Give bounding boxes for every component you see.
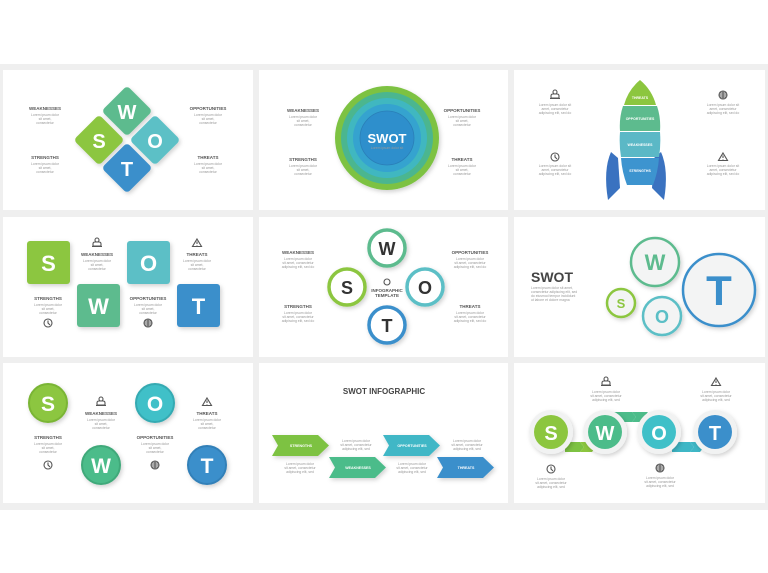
panel: connected circles: Lorem ipsum dolor [537, 477, 566, 481]
panel: rocket: amet, consectetur [542, 168, 569, 172]
panel: diamond SWOT [3, 70, 253, 210]
labels [29, 106, 61, 125]
panel: concentric circles: STRENGTHS [289, 157, 317, 162]
panel: rocket: Lorem ipsum dolor sit [707, 103, 739, 107]
panel: square tiles: Lorem ipsum dolor [83, 259, 112, 263]
panel: square tiles: Lorem ipsum dolor [134, 303, 163, 307]
panel: square tiles: sit amet, [142, 307, 154, 311]
panel: ring circles: STRENGTHS [284, 304, 312, 309]
panel: chevron arrows: sit amet, consectetur [451, 443, 484, 447]
panel: square tiles: consectetur [39, 311, 58, 315]
panel: bubble SWOT: W [645, 250, 666, 275]
panel: concentric circles [259, 70, 508, 210]
panel: chevron arrows: WEAKNESSES [345, 466, 371, 470]
panel: connected circles: S [544, 423, 558, 445]
panel: diamond SWOT: W [118, 102, 137, 124]
panel: chevron arrows: sit amet, consectetur [340, 443, 373, 447]
panel: ring circles: T [382, 316, 392, 336]
panel: square tiles: T [192, 294, 206, 319]
panel: diamond SWOT: T [121, 159, 133, 181]
panel: square tiles: S [41, 251, 56, 276]
panel: chevron arrows: THREATS [458, 466, 475, 470]
panel: concentric circles: sit amet, [456, 168, 468, 172]
panel: concentric circles: Lorem ipsum dolor [289, 115, 318, 119]
labels: consectetur [36, 121, 55, 125]
panel: round badges: sit amet, [201, 422, 213, 426]
panel: ring circles: Lorem ipsum dolor [284, 257, 313, 261]
panel: diamond SWOT: OPPORTUNITIES [190, 106, 226, 111]
panel: round badges: consectetur [146, 450, 165, 454]
panel: square tiles: W [88, 294, 109, 319]
rocket [606, 80, 666, 200]
panel: square tiles: STRENGTHS [34, 296, 62, 301]
panel: ring circles: O [418, 278, 432, 298]
panel: diamond SWOT: consectetur [199, 121, 218, 125]
rocket: STRENGTHS [629, 169, 651, 173]
panel: connected circles: sit amet, consectetur [700, 394, 733, 398]
panel: ring circles: TEMPLATE [375, 293, 399, 298]
panel: round badges: T [201, 455, 214, 478]
panel: concentric circles: Lorem ipsum dolor [289, 164, 318, 168]
panel: round badges: consectetur [92, 426, 111, 430]
panel: ring circles: THREATS [460, 304, 480, 309]
panel: square tiles [3, 217, 253, 357]
panel: ring circles: adipiscing elit, sed do [454, 319, 486, 323]
panel: round badges: Lorem ipsum dolor [87, 418, 116, 422]
panel: concentric circles: sit amet, [456, 119, 468, 123]
panel: connected circles: T [709, 423, 721, 445]
panel: square tiles: OPPORTUNITIES [130, 296, 166, 301]
panel: diamond SWOT: Lorem ipsum dolor [194, 113, 223, 117]
panel: chevron arrows: sit amet, consectetur [284, 466, 317, 470]
panel: square tiles: Lorem ipsum dolor [183, 259, 212, 263]
panel: chevron arrows: adipiscing elit, sed [286, 470, 314, 474]
panel: rocket: Lorem ipsum dolor sit [707, 164, 739, 168]
panel: bubble SWOT: SWOT [531, 269, 573, 285]
panel: chevron arrows: adipiscing elit, sed [398, 470, 426, 474]
panel: ring circles: INFOGRAPHIC [371, 288, 404, 293]
panel: chevron arrows [259, 363, 508, 503]
panel: concentric circles: sit amet, [297, 119, 309, 123]
panel: bubble SWOT: S [617, 296, 626, 311]
panel: round badges: sit amet, [95, 422, 107, 426]
panel: ring circles: W [378, 239, 396, 259]
panel: diamond SWOT: sit amet, [202, 117, 214, 121]
panel: connected circles [514, 363, 765, 503]
panel: chevron arrows: adipiscing elit, sed [342, 447, 370, 451]
panel: chevron arrows: Lorem ipsum dolor [398, 462, 427, 466]
panel: concentric circles: consectetur [294, 172, 313, 176]
panel: diamond SWOT: sit amet, [39, 166, 51, 170]
panel: chevron arrows: STRENGTHS [290, 444, 313, 448]
panel: concentric circles: Lorem ipsum dolor [448, 115, 477, 119]
rocket: THREATS [632, 96, 649, 100]
panel: connected circles: Lorem ipsum dolor [702, 390, 731, 394]
panel: concentric circles: consectetur [453, 172, 472, 176]
panel: round badges: Lorem ipsum dolor [34, 442, 63, 446]
panel: rocket: adipiscing elit, sed do [707, 111, 739, 115]
panel: square tiles: O [140, 251, 157, 276]
panel: bubble SWOT: Lorem ipsum dolor sit amet, [531, 286, 573, 290]
panel: square tiles: sit amet, [91, 263, 103, 267]
panel: round badges: STRENGTHS [34, 435, 62, 440]
panel: diamond SWOT: Lorem ipsum dolor [194, 162, 223, 166]
panel: concentric circles: Lorem ipsum dolor [448, 164, 477, 168]
panel: connected circles: O [651, 423, 667, 445]
panel: square tiles: WEAKNESSES [81, 252, 113, 257]
circle target [335, 86, 439, 190]
labels: Lorem ipsum dolor [31, 113, 60, 117]
panel: bubble SWOT: do eiusmod tempor incididunt [531, 294, 575, 298]
panel: connected circles: sit amet, consectetur [535, 481, 568, 485]
panel: ring circles: S [341, 278, 353, 298]
panel: rocket: Lorem ipsum dolor sit [539, 103, 571, 107]
panel: rocket: amet, consectetur [710, 107, 737, 111]
panel: ring circles: Lorem ipsum dolor [456, 311, 485, 315]
panel: round badges: S [41, 393, 55, 416]
panel: chevron arrows: sit amet, consectetur [396, 466, 429, 470]
rocket: OPPORTUNITIES [626, 117, 655, 121]
panel: concentric circles: OPPORTUNITIES [444, 108, 480, 113]
panel: ring circles: Lorem ipsum dolor [284, 311, 313, 315]
panel: ring circles: adipiscing elit, sed do [454, 265, 486, 269]
panel: chevron arrows: OPPORTUNITIES [397, 444, 427, 448]
panel: ring circles: sit amet, consectetur [454, 315, 487, 319]
panel: ring circles [259, 217, 508, 357]
panel: ring circles: sit amet, consectetur [454, 261, 487, 265]
panel: chevron arrows: Lorem ipsum dolor [286, 462, 315, 466]
panel: rocket: amet, consectetur [542, 107, 569, 111]
panel: ring circles: adipiscing elit, sed do [282, 265, 314, 269]
panel: ring circles: sit amet, consectetur [282, 315, 315, 319]
panel: diamond SWOT: consectetur [199, 170, 218, 174]
panel: concentric circles: consectetur [453, 123, 472, 127]
panel: concentric circles: SWOT [368, 131, 407, 146]
panel: connected circles: sit amet, consectetur [644, 480, 677, 484]
panel: diamond SWOT: sit amet, [202, 166, 214, 170]
panel: round badges [3, 363, 253, 503]
panel: square tiles: THREATS [187, 252, 207, 257]
panel: round badges: W [91, 455, 111, 478]
panel: round badges: Lorem ipsum dolor [141, 442, 170, 446]
panel: connected circles: adipiscing elit, sed [592, 398, 620, 402]
panel: square tiles: sit amet, [191, 263, 203, 267]
panel: concentric circles: THREATS [452, 157, 472, 162]
panel: square tiles: Lorem ipsum dolor [34, 303, 63, 307]
panel: round badges: consectetur [39, 450, 58, 454]
panel: rocket: adipiscing elit, sed do [539, 172, 571, 176]
panel: square tiles: sit amet, [42, 307, 54, 311]
panel: round badges: consectetur [198, 426, 217, 430]
panel: connected circles: adipiscing elit, sed [537, 485, 565, 489]
panel: concentric circles: consectetur [294, 123, 313, 127]
panel: connected circles: Lorem ipsum dolor [646, 476, 675, 480]
background band [0, 64, 768, 510]
panel: bubble SWOT: T [706, 267, 732, 314]
panel: connected circles: sit amet, consectetur [590, 394, 623, 398]
panel: chevron arrows: Lorem ipsum dolor [342, 439, 371, 443]
panel: rocket: amet, consectetur [710, 168, 737, 172]
panel: ring circles: OPPORTUNITIES [452, 250, 488, 255]
panel: chevron arrows: Lorem ipsum dolor [453, 439, 482, 443]
panel: ring circles: sit amet, consectetur [282, 261, 315, 265]
panel: chevron arrows: adipiscing elit, sed [453, 447, 481, 451]
labels: sit amet, [39, 117, 51, 121]
panel: diamond SWOT: O [147, 131, 163, 153]
panel: concentric circles: sit amet, [297, 168, 309, 172]
panel: concentric circles: WEAKNESSES [287, 108, 319, 113]
panel: connected circles: adipiscing elit, sed [702, 398, 730, 402]
panel: square tiles: consectetur [188, 267, 207, 271]
panel: rocket [514, 70, 765, 210]
panel: ring circles: WEAKNESSES [282, 250, 314, 255]
panel: connected circles: Lorem ipsum dolor [592, 390, 621, 394]
panel: round badges: THREATS [197, 411, 217, 416]
panel: bubble SWOT [514, 217, 765, 357]
panel: diamond SWOT: THREATS [198, 155, 218, 160]
panel: bubble SWOT: O [655, 307, 669, 327]
panel: diamond SWOT: STRENGTHS [31, 155, 59, 160]
panel: square tiles: consectetur [139, 311, 158, 315]
panel: concentric circles: Lorem ipsum dolor sit [371, 146, 403, 150]
panel: square tiles: consectetur [88, 267, 107, 271]
panel: connected circles: W [596, 423, 615, 445]
panel: diamond SWOT: S [92, 131, 106, 153]
panel: round badges: sit amet, [42, 446, 54, 450]
panel: round badges: sit amet, [149, 446, 161, 450]
panel: rocket: adipiscing elit, sed do [707, 172, 739, 176]
panel: round badges: O [147, 393, 163, 416]
panel: rocket: Lorem ipsum dolor sit [539, 164, 571, 168]
panel: diamond SWOT: consectetur [36, 170, 55, 174]
panel: diamond SWOT: Lorem ipsum dolor [31, 162, 60, 166]
panel: bubble SWOT: consectetur adipiscing elit, sed [531, 290, 577, 294]
panel: round badges: Lorem ipsum dolor [193, 418, 222, 422]
diamond tiles [74, 86, 180, 193]
rocket: WEAKNESSES [628, 143, 653, 147]
panel: ring circles: adipiscing elit, sed do [282, 319, 314, 323]
panel: round badges: OPPORTUNITIES [137, 435, 173, 440]
panel: round badges: WEAKNESSES [85, 411, 117, 416]
panel: connected circles: adipiscing elit, sed [646, 484, 674, 488]
connector arrows [565, 412, 704, 452]
panel: bubble SWOT: ut labore et dolore magna [531, 298, 570, 302]
labels: WEAKNESSES [29, 106, 61, 111]
panel: rocket: adipiscing elit, sed do [539, 111, 571, 115]
title: SWOT INFOGRAPHIC [343, 387, 425, 396]
panel: ring circles: Lorem ipsum dolor [456, 257, 485, 261]
